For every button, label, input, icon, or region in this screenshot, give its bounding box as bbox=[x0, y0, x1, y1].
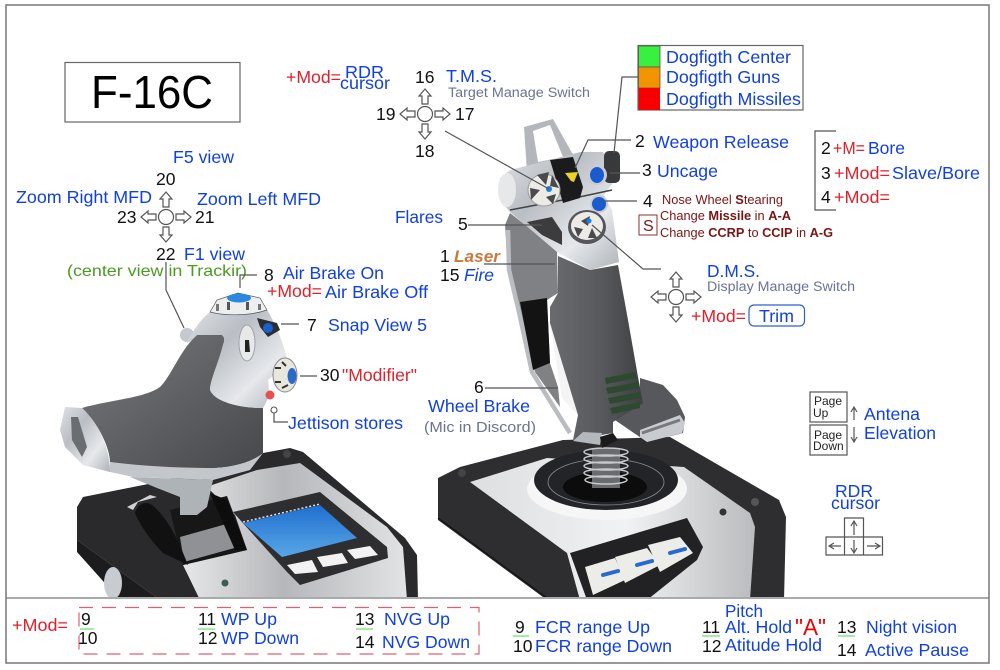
jettison callout: Jettison stores bbox=[288, 413, 403, 433]
throttle hat switch: Zoom Left MFD bbox=[197, 189, 321, 209]
modifier bracket list: +M= bbox=[833, 138, 865, 158]
modifier bottom group: WP Down bbox=[221, 628, 299, 648]
night vision and pause: Night vision bbox=[866, 617, 957, 637]
wheel brake callout: (Mic in Discord) bbox=[424, 419, 536, 436]
D.M.S. hat switch: Trim bbox=[759, 306, 794, 326]
FCR range: FCR range Down bbox=[535, 636, 672, 656]
autopilot pitch bbox=[702, 601, 826, 656]
antenna elevation keys: Down bbox=[813, 439, 844, 453]
RDR cursor modifier label: cursor bbox=[340, 73, 390, 93]
FCR range: 9 bbox=[515, 617, 525, 637]
modifier bottom group: 12 bbox=[198, 628, 217, 648]
laser and fire callout: 15 bbox=[440, 265, 459, 285]
snap view callout bbox=[281, 315, 427, 335]
night vision and pause: Active Pause bbox=[865, 640, 969, 660]
throttle hat switch: F1 view bbox=[184, 244, 245, 264]
modifier bottom group: WP Up bbox=[221, 609, 277, 629]
dogfight switch legend: Dogfigth Missiles bbox=[666, 89, 801, 109]
autopilot pitch: Alt. Hold bbox=[725, 617, 792, 637]
autopilot pitch: 11 bbox=[702, 617, 720, 637]
FCR range: 10 bbox=[513, 636, 533, 656]
modifier bottom group: 9 bbox=[81, 609, 91, 629]
modifier bracket list: Slave/Bore bbox=[892, 163, 980, 183]
modifier bracket list: 4 bbox=[821, 187, 831, 207]
night vision and pause: 13 bbox=[837, 617, 856, 637]
air brake callout bbox=[240, 263, 428, 302]
flares callout: Flares bbox=[395, 207, 443, 227]
modifier bracket list: +Mod= bbox=[834, 163, 890, 183]
title: F-16C bbox=[91, 66, 213, 118]
callout 3 uncage bbox=[610, 160, 718, 181]
air brake callout: Air Brake On bbox=[283, 263, 384, 283]
laser and fire callout: Fire bbox=[464, 265, 494, 285]
modifier bottom group: 11 bbox=[198, 609, 216, 629]
modifier bottom group: 10 bbox=[78, 628, 98, 648]
wheel brake callout: 6 bbox=[474, 377, 484, 397]
callout 2 weapon release: 2 bbox=[635, 131, 645, 151]
modifier bracket list: Bore bbox=[868, 138, 905, 158]
throttle hat switch bbox=[16, 147, 321, 328]
antenna elevation keys bbox=[810, 392, 936, 455]
modifier bottom group: NVG Down bbox=[382, 632, 470, 652]
dogfight switch legend: Dogfigth Center bbox=[666, 47, 791, 67]
modifier callout: "Modifier" bbox=[342, 365, 417, 385]
RDR cursor keys: RDR bbox=[835, 481, 873, 501]
callout 4 nose wheel steering: 4 bbox=[643, 191, 653, 211]
antenna elevation keys: Page bbox=[814, 428, 842, 442]
T.M.S. hat switch: Target Manage Switch bbox=[448, 85, 590, 100]
antenna elevation keys: Up bbox=[813, 406, 829, 420]
RDR cursor modifier label: RDR bbox=[345, 62, 384, 82]
throttle hat switch: F5 view bbox=[173, 147, 234, 167]
divider bbox=[6, 597, 989, 599]
T.M.S. hat switch: T.M.S. bbox=[446, 66, 497, 86]
modifier bracket list: +Mod= bbox=[834, 187, 890, 207]
air brake callout: Air Brake Off bbox=[325, 282, 428, 302]
photo: throttle bbox=[60, 293, 418, 600]
throttle hat switch: 23 bbox=[117, 207, 136, 227]
autopilot pitch: 12 bbox=[702, 636, 721, 656]
modifier bottom group: NVG Up bbox=[384, 609, 450, 629]
laser and fire callout bbox=[440, 246, 555, 285]
modifier bottom group bbox=[12, 608, 479, 654]
wheel brake callout: Wheel Brake bbox=[428, 396, 530, 416]
antenna elevation keys: Antena bbox=[864, 404, 920, 424]
T.M.S. hat switch bbox=[376, 66, 590, 189]
RDR cursor modifier label bbox=[286, 62, 390, 93]
T.M.S. hat switch: 18 bbox=[415, 141, 434, 161]
D.M.S. hat switch: +Mod= bbox=[691, 306, 746, 326]
T.M.S. hat switch: 16 bbox=[415, 67, 434, 87]
callout 4 nose wheel steering bbox=[603, 191, 833, 240]
modifier bottom group: 13 bbox=[355, 609, 374, 629]
modifier bottom group: 14 bbox=[355, 632, 375, 652]
snap view callout: 7 bbox=[307, 315, 317, 335]
autopilot pitch: "A" bbox=[795, 614, 826, 640]
RDR cursor keys: cursor bbox=[831, 493, 880, 513]
laser and fire callout: Laser bbox=[454, 247, 501, 266]
air brake callout: +Mod= bbox=[267, 281, 322, 301]
jettison callout bbox=[271, 407, 403, 433]
throttle hat switch: (center view in Trackir) bbox=[67, 263, 247, 280]
callout 2 weapon release: Weapon Release bbox=[653, 132, 789, 152]
D.M.S. hat switch: Display Manage Switch bbox=[707, 279, 855, 294]
modifier bracket list: 3 bbox=[821, 163, 831, 183]
RDR cursor modifier label: +Mod= bbox=[286, 67, 341, 87]
autopilot pitch: Atitude Hold bbox=[725, 635, 822, 655]
modifier bottom group: +Mod= bbox=[12, 615, 68, 635]
night vision and pause bbox=[837, 617, 969, 660]
air brake callout: 8 bbox=[264, 265, 274, 285]
autopilot pitch: Pitch bbox=[725, 601, 763, 621]
callout 4 nose wheel steering: Change Missile in A-A bbox=[660, 209, 791, 223]
antenna elevation keys: Page bbox=[814, 394, 842, 408]
modifier bracket list bbox=[815, 131, 980, 210]
RDR cursor keys bbox=[826, 481, 882, 555]
throttle hat switch: 22 bbox=[156, 244, 175, 264]
callout 4 nose wheel steering: Change CCRP to CCIP in A-G bbox=[660, 226, 833, 240]
FCR range bbox=[513, 617, 672, 656]
D.M.S. hat switch: D.M.S. bbox=[707, 261, 760, 281]
wheel brake callout bbox=[424, 377, 558, 436]
modifier bracket list: 2 bbox=[821, 138, 831, 158]
night vision and pause: 14 bbox=[837, 640, 857, 660]
snap view callout: Snap View 5 bbox=[328, 315, 427, 335]
throttle hat switch: 21 bbox=[195, 207, 214, 227]
modifier callout: 30 bbox=[320, 365, 340, 385]
FCR range: FCR range Up bbox=[535, 617, 650, 637]
callout 3 uncage: 3 bbox=[642, 160, 652, 180]
callout 2 weapon release bbox=[575, 131, 789, 168]
flares callout bbox=[395, 207, 542, 234]
laser and fire callout: 1 bbox=[440, 246, 450, 266]
T.M.S. hat switch: 19 bbox=[376, 104, 395, 124]
D.M.S. hat switch bbox=[592, 225, 855, 326]
title bbox=[65, 62, 240, 122]
modifier callout bbox=[300, 365, 417, 385]
antenna elevation keys: Elevation bbox=[864, 423, 936, 443]
throttle hat switch: Zoom Right MFD bbox=[16, 187, 152, 207]
throttle hat switch: 20 bbox=[156, 169, 176, 189]
T.M.S. hat switch: 17 bbox=[455, 104, 474, 124]
callout 4 nose wheel steering: S bbox=[643, 218, 654, 235]
callout 3 uncage: Uncage bbox=[657, 161, 718, 181]
dogfight switch legend: Dogfigth Guns bbox=[666, 67, 780, 87]
flares callout: 5 bbox=[458, 214, 468, 234]
callout 4 nose wheel steering: Nose Wheel Stearing bbox=[662, 193, 783, 207]
photo: joystick bbox=[438, 119, 786, 600]
dogfight switch legend bbox=[614, 46, 803, 153]
